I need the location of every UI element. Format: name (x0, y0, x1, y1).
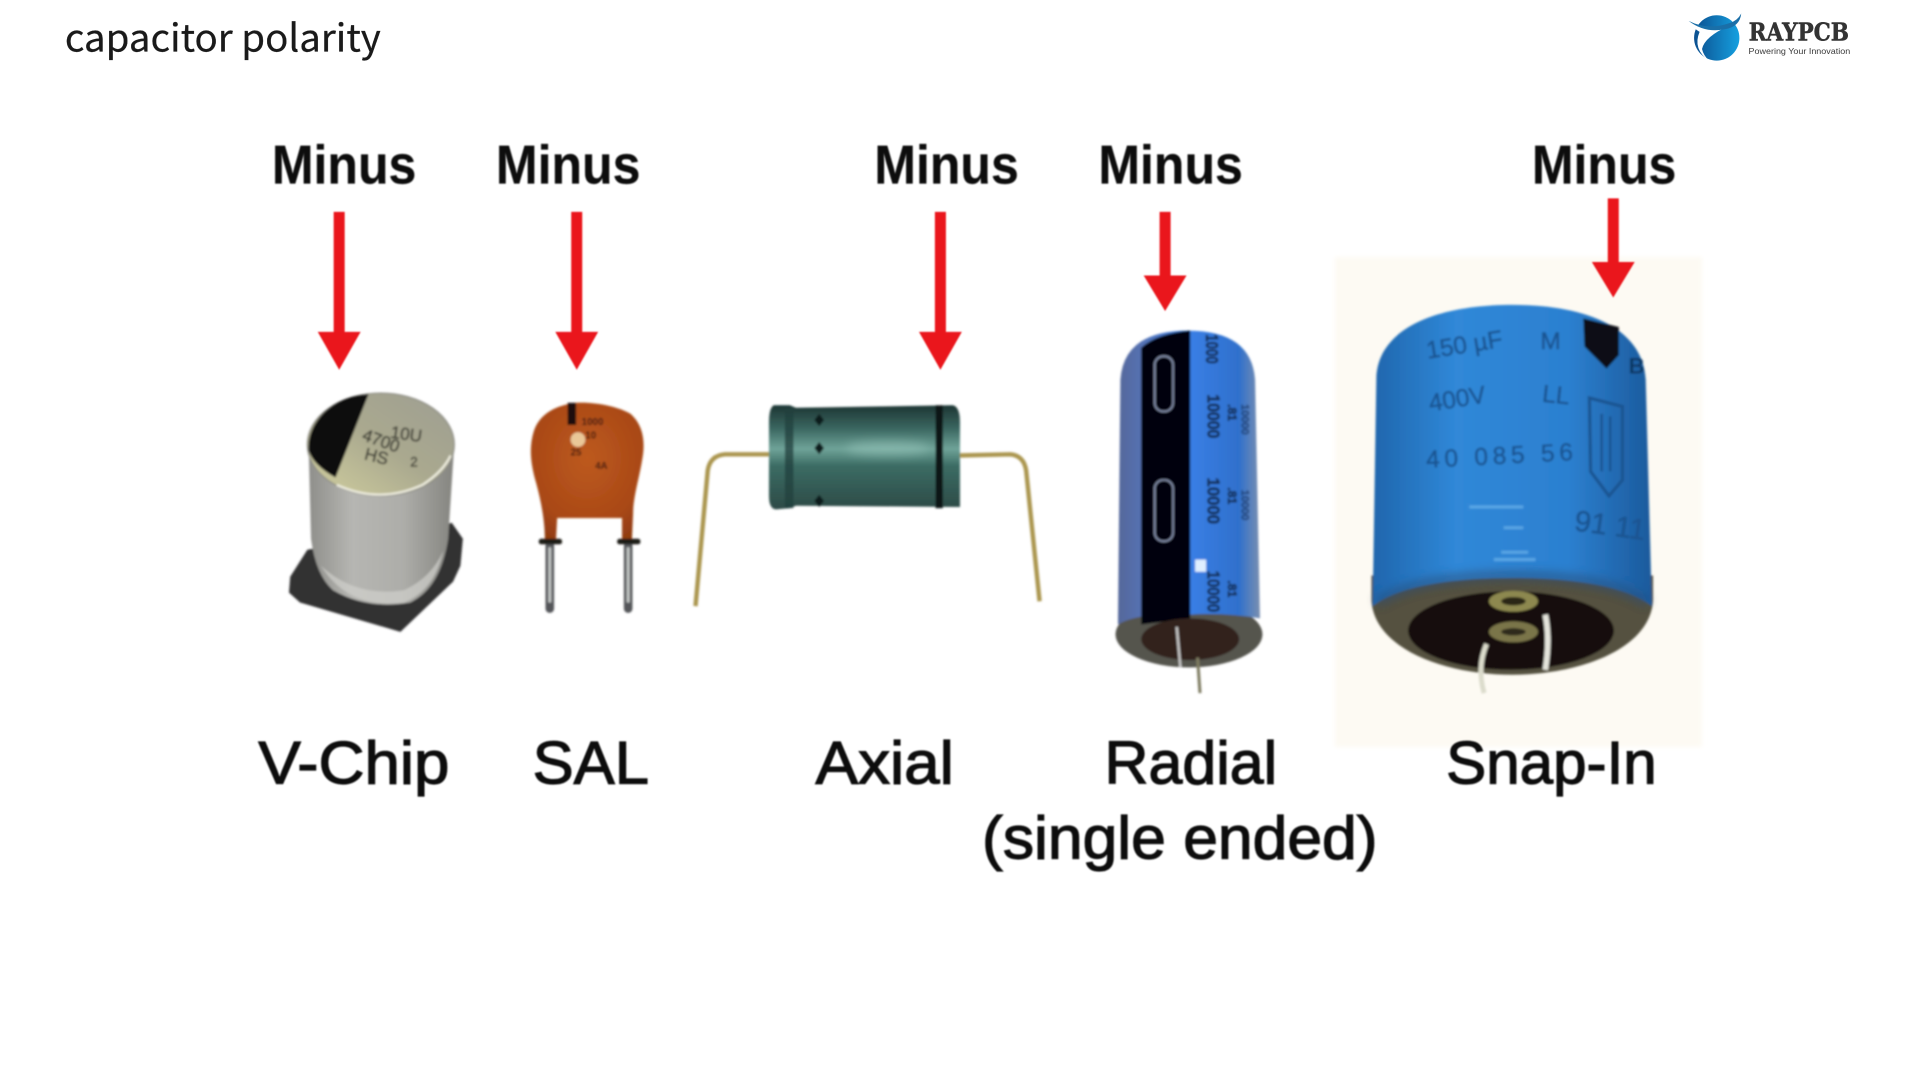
print: LL (1541, 381, 1571, 410)
capacitor: V-Chip (289, 393, 463, 632)
logo: RAYPCB (1687, 13, 1850, 61)
print: .81 (1225, 404, 1239, 421)
print: 10000 (1239, 404, 1251, 435)
print: .81 (1225, 487, 1239, 505)
print: 10000 (1203, 478, 1223, 524)
arrow: V-Chip (318, 212, 361, 370)
capacitor: Axial (696, 405, 1040, 606)
print: 25 (571, 448, 582, 459)
terminals (1489, 591, 1538, 612)
print: 10000 (1203, 394, 1223, 438)
polarity mark (308, 394, 369, 478)
print: 10000 (1239, 490, 1251, 520)
glint (1195, 560, 1206, 572)
logo wordmark: RAYPCB (1749, 17, 1849, 46)
washers (539, 539, 562, 544)
lid print (360, 422, 423, 470)
bottom hole (1141, 618, 1239, 660)
label: Minus Snap-In: Minus (1532, 134, 1676, 196)
highlights (1469, 507, 1536, 560)
body highlight (846, 441, 929, 456)
print: 91 11 (1572, 504, 1648, 547)
print: M (1540, 328, 1561, 355)
body (531, 403, 644, 541)
print: 10 (585, 430, 597, 441)
lid print: 4700 (360, 425, 403, 456)
print: 4A (595, 461, 608, 472)
body (769, 405, 960, 509)
shield logo (1589, 398, 1622, 496)
inner hole (1408, 591, 1614, 670)
slot marks (1155, 356, 1173, 411)
can (309, 443, 454, 604)
polarity mark (1583, 318, 1619, 369)
polarity band (1141, 331, 1190, 624)
rim (1371, 576, 1653, 675)
print: 10000 (1203, 571, 1223, 612)
body (1118, 331, 1260, 624)
print: .81 (1225, 580, 1239, 598)
logo tagline: Powering Your Innovation (1749, 46, 1850, 56)
label: Minus Radial: Minus (1098, 134, 1243, 196)
minus marks (814, 414, 824, 507)
icon: logo globe (1687, 13, 1741, 61)
label: SAL: SAL (533, 730, 649, 797)
pins (1545, 615, 1548, 670)
print: 40 085 56 (1425, 439, 1574, 474)
body-to-rim shading (1378, 576, 1647, 602)
print (1202, 334, 1251, 612)
capacitor: Radial (1116, 331, 1262, 693)
front lead (1198, 658, 1200, 693)
lid print: HS (363, 444, 391, 469)
arrow: SAL (555, 212, 598, 370)
end ring (785, 408, 793, 508)
print highlight (571, 432, 585, 447)
arrow: Axial (919, 212, 962, 370)
print: 1000 (1202, 334, 1222, 364)
capacitor: Snap-In (1371, 305, 1653, 693)
base (289, 523, 463, 632)
print (571, 417, 608, 472)
polarity stripe (568, 403, 576, 425)
title: capacitor polarity (65, 7, 381, 62)
capacitor: SAL (531, 403, 644, 609)
body (1373, 305, 1652, 606)
label: Minus V-Chip: Minus (272, 134, 416, 196)
can lower ring (321, 551, 443, 603)
lid print: 2 (410, 455, 418, 470)
label: Axial: Axial (816, 730, 954, 797)
print: 1000 (582, 417, 604, 428)
lid (307, 393, 454, 496)
leads (696, 454, 771, 606)
label: Snap-In: Snap-In (1446, 730, 1657, 797)
label: Minus SAL: Minus (496, 134, 640, 196)
label: Radial: Radial (1104, 730, 1277, 797)
label: (single ended): (single ended) (982, 804, 1378, 871)
print: B (1629, 353, 1644, 378)
print: 400V (1427, 382, 1488, 417)
lid print: 10U (390, 422, 423, 446)
polarity band (936, 405, 943, 508)
arrow: Radial (1144, 212, 1187, 311)
print (1424, 326, 1648, 547)
label: Minus Axial: Minus (874, 134, 1019, 196)
lid rim highlight (337, 456, 451, 495)
leads (550, 541, 628, 609)
arrow: Snap-In (1592, 198, 1635, 298)
panel: snap-in background (1335, 257, 1702, 747)
print: 150 µF (1424, 326, 1504, 365)
rim (1116, 601, 1262, 667)
label: V-Chip: V-Chip (258, 730, 449, 797)
